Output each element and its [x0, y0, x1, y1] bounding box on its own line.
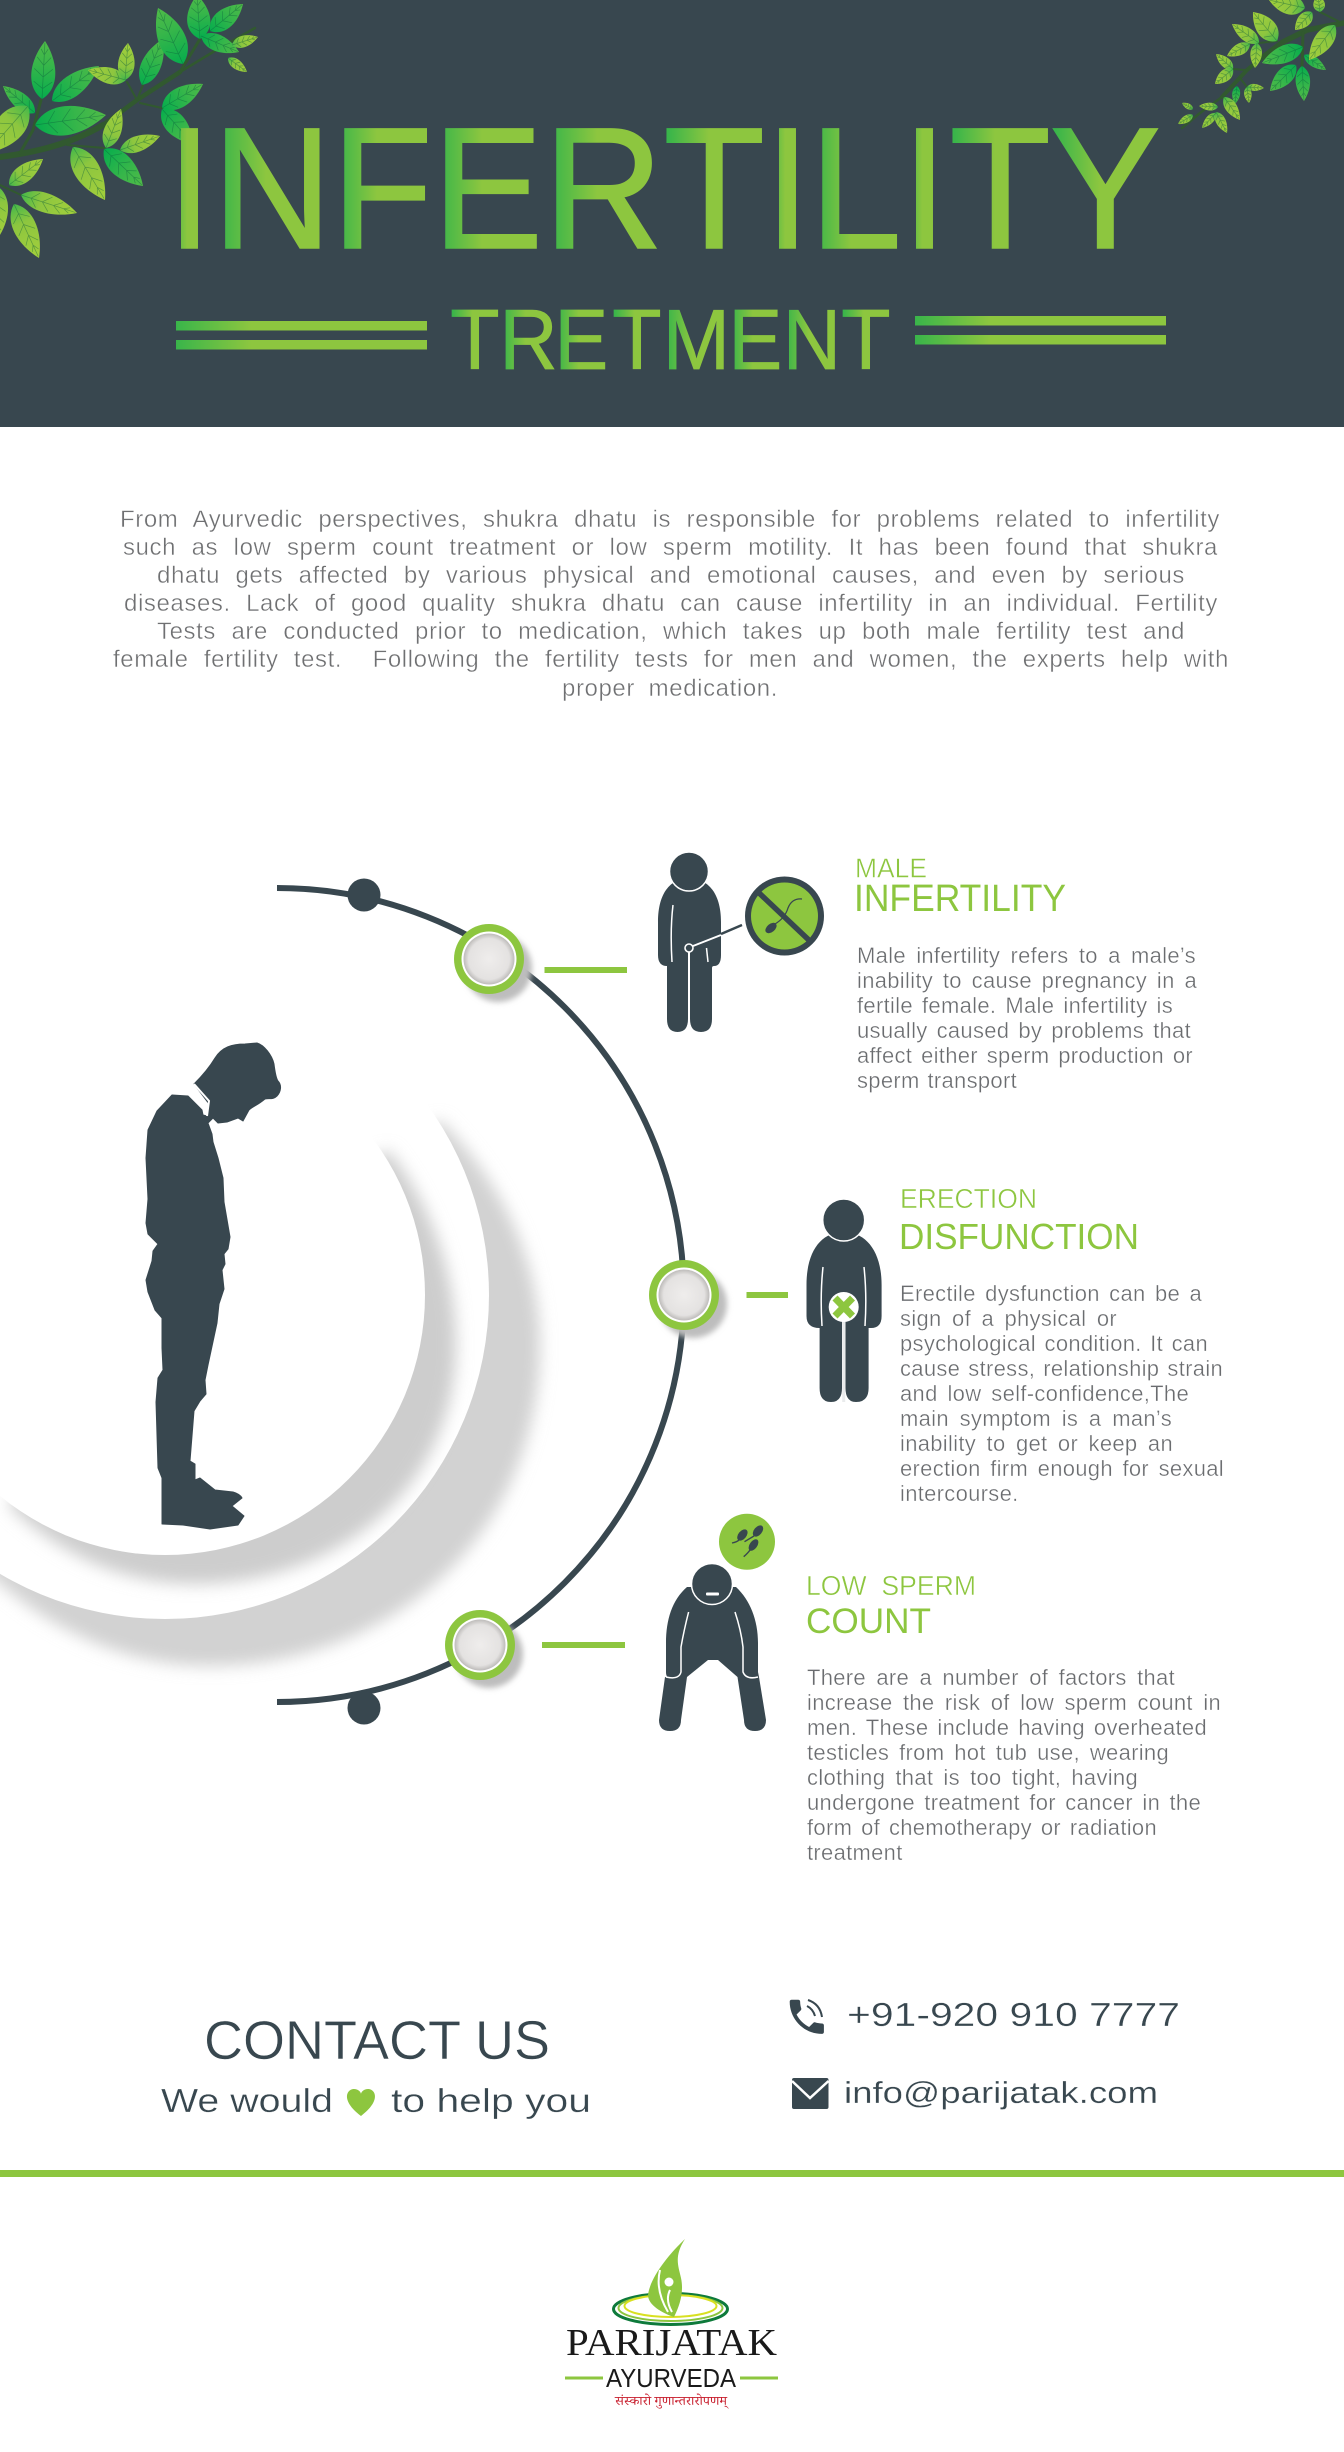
heading: erection dysfunction: DISFUNCTION	[899, 1216, 1139, 1257]
intro paragraph: From Ayurvedic perspectives, shukra dhatu is responsible for problems related to infertility	[120, 506, 1220, 533]
panel: male infertility	[658, 852, 1197, 1093]
icon: envelope	[792, 2078, 828, 2109]
icon: standing man with crossed sperm	[658, 852, 824, 1032]
panel: low sperm count	[659, 1514, 1221, 1865]
intro paragraph	[113, 506, 1229, 702]
body text: inability to get or keep an	[900, 1431, 1173, 1456]
body text: undergone treatment for cancer in the	[807, 1790, 1201, 1815]
title: INFERTILITY: N	[212, 91, 332, 285]
tagline with heart: We would	[161, 2082, 333, 2119]
body text: increase the risk of low sperm count in	[807, 1690, 1221, 1715]
subtitle: TRETMENT with double rules: T	[612, 293, 662, 388]
left leafy branch	[0, 0, 260, 263]
subtitle: TRETMENT with double rules: T	[841, 293, 891, 388]
connector: low sperm count	[542, 1642, 625, 1648]
right leafy branch	[1176, 0, 1344, 135]
body text: erection firm enough for sexual	[900, 1456, 1224, 1481]
title: INFERTILITY: I	[166, 91, 212, 285]
crescent shadows	[0, 971, 540, 1666]
logo subtitle with rules: AYURVEDA	[606, 2363, 737, 2393]
intro paragraph: dhatu gets affected by various physical and emotional causes, and even by serious	[157, 562, 1185, 589]
title: INFERTILITY: I	[764, 91, 810, 285]
node: erection dysfunction	[649, 1260, 727, 1338]
title: INFERTILITY: F	[331, 91, 433, 285]
title: INFERTILITY: L	[809, 91, 902, 285]
body text	[900, 1281, 1224, 1506]
body text: treatment	[807, 1840, 903, 1865]
green divider bar	[0, 2170, 1344, 2177]
body text: intercourse.	[900, 1481, 1019, 1506]
body text	[807, 1665, 1221, 1865]
email address: info@parijatak.com	[844, 2076, 1158, 2110]
heading: erection dysfunction: ERECTION	[900, 1183, 1037, 1214]
tagline with heart: to help you	[391, 2082, 591, 2119]
logo emblem	[614, 2239, 728, 2324]
body text: usually caused by problems that	[857, 1018, 1191, 1043]
connector: erection dysfunction	[746, 1292, 788, 1298]
title: INFERTILITY: R	[543, 91, 663, 285]
body text	[857, 943, 1197, 1093]
heading: male infertility: MALE	[855, 852, 927, 884]
silhouette: man with bowed head	[146, 1043, 281, 1529]
subtitle: TRETMENT with double rules: R	[499, 293, 558, 388]
body text: affect either sperm production or	[857, 1043, 1193, 1068]
logo subtitle with rules	[565, 2363, 778, 2393]
icon: man with groin cross	[806, 1200, 882, 1402]
body text: and low self-confidence,The	[900, 1381, 1189, 1406]
arc diagram with silhouette	[0, 878, 788, 1724]
intro paragraph: proper medication.	[562, 675, 778, 702]
logo motto: संस्कारो गुणान्तरारोपणम्	[614, 2393, 729, 2409]
title: INFERTILITY: I	[902, 91, 948, 285]
body text: testicles from hot tub use, wearing	[807, 1740, 1169, 1765]
intro paragraph: female fertility test. Following the fertility tests for men and women, the experts help with	[113, 646, 1229, 673]
body text: Erectile dysfunction can be a	[900, 1281, 1202, 1306]
intro paragraph: Tests are conducted prior to medication, which takes up both male fertility test and	[157, 618, 1185, 645]
subtitle: TRETMENT with double rules: N	[783, 293, 841, 388]
subtitle: TRETMENT with double rules: M	[663, 293, 730, 388]
body text: clothing that is too tight, having	[807, 1765, 1138, 1790]
body text: Male infertility refers to a male’s	[857, 943, 1196, 968]
body text: inability to cause pregnancy in a	[857, 968, 1197, 993]
icon: phone	[790, 2000, 824, 2034]
heading: erection dysfunction	[899, 1183, 1139, 1257]
subtitle: TRETMENT with double rules: E	[554, 293, 608, 388]
title: INFERTILITY: T	[950, 91, 1051, 285]
subtitle: TRETMENT with double rules: E	[728, 293, 782, 388]
title: INFERTILITY: T	[664, 91, 765, 285]
icon: slumped man with sperm bubble	[659, 1514, 775, 1731]
heading: low sperm count	[806, 1570, 976, 1640]
heading: contact us: CONTACT US	[204, 2009, 550, 2071]
intro paragraph: such as low sperm count treatment or low sperm motility. It has been found that shukra	[123, 534, 1218, 561]
body text: There are a number of factors that	[807, 1665, 1175, 1690]
title: INFERTILITY: Y	[1050, 91, 1161, 285]
body text: psychological condition. It can	[900, 1331, 1208, 1356]
phone number: +91-920 910 7777	[847, 1996, 1180, 2033]
body text: fertile female. Male infertility is	[857, 993, 1173, 1018]
header banner	[0, 0, 1344, 427]
heading: male infertility	[854, 852, 1066, 920]
subtitle: TRETMENT with double rules: T	[450, 293, 500, 388]
heading: low sperm count: COUNT	[806, 1602, 931, 1640]
intro paragraph: diseases. Lack of good quality shukra dhatu can cause infertility in an individual. Fertility	[124, 590, 1218, 617]
logo wordmark: PARIJATAK	[566, 2322, 778, 2364]
logo: Parijatak Ayurveda	[565, 2239, 778, 2409]
contact section	[161, 1996, 1180, 2119]
subtitle: TRETMENT with double rules	[176, 293, 1166, 388]
curved timeline arc	[277, 888, 684, 1702]
arc end dots	[348, 878, 380, 1724]
body text: cause stress, relationship strain	[900, 1356, 1223, 1381]
panel: erection dysfunction	[806, 1183, 1224, 1506]
heading: male infertility: INFERTILITY	[854, 878, 1066, 920]
body text: sperm transport	[857, 1068, 1017, 1093]
title: INFERTILITY: E	[432, 91, 543, 285]
body text: sign of a physical or	[900, 1306, 1117, 1331]
body text: form of chemotherapy or radiation	[807, 1815, 1157, 1840]
node: male infertility	[454, 924, 532, 1002]
title: INFERTILITY	[166, 91, 1161, 285]
node: low sperm count	[445, 1610, 523, 1688]
heading: low sperm count: LOW SPERM	[806, 1570, 976, 1601]
body text: main symptom is a man’s	[900, 1406, 1172, 1431]
tagline with heart	[161, 2082, 591, 2119]
connector: male infertility	[544, 967, 627, 973]
body text: men. These include having overheated	[807, 1715, 1207, 1740]
